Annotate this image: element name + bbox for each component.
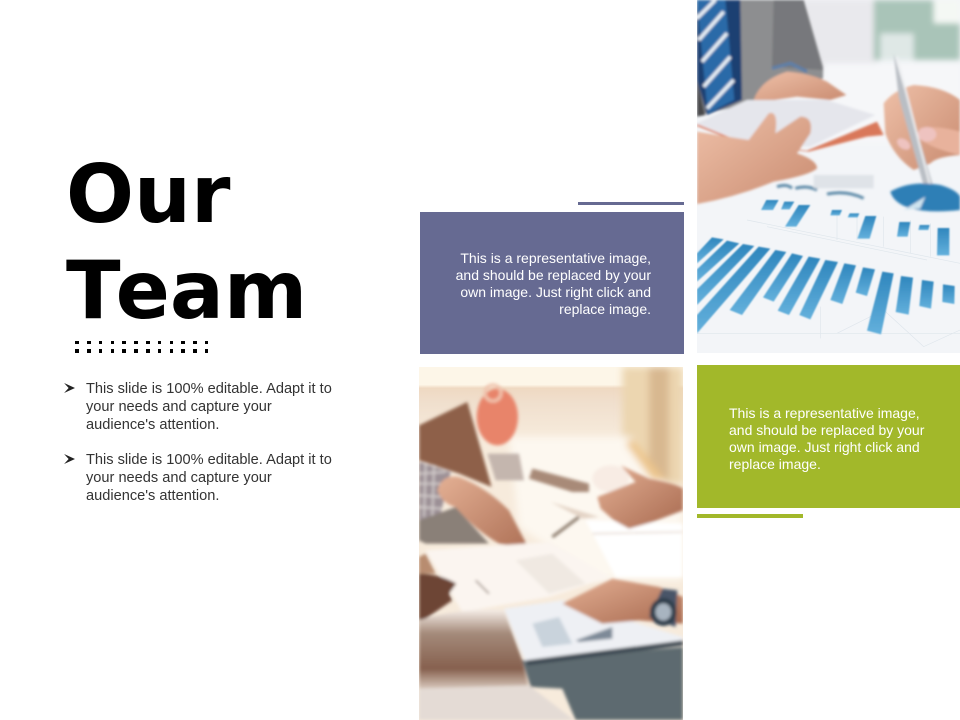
bullet 2: your needs and capture your: [86, 470, 272, 486]
bullet 1: audience's attention.: [86, 417, 219, 433]
bullet 2: This slide is 100% editable. Adapt it to: [86, 452, 332, 468]
caption text: and should be replaced by your: [729, 422, 924, 438]
dotted decoration under title: [75, 341, 208, 353]
caption text: [456, 250, 651, 317]
bullet 1: your needs and capture your: [86, 399, 272, 415]
bullet 2: audience's attention.: [86, 488, 219, 504]
caption text: replace image.: [729, 456, 821, 472]
panel: purple caption: [420, 212, 684, 354]
caption text: [729, 405, 924, 472]
bullet 2: [64, 452, 332, 504]
accent line: green: [697, 514, 803, 518]
title: [66, 148, 307, 337]
caption text: replace image.: [559, 301, 651, 317]
panel: green caption: [697, 365, 960, 508]
caption text: This is a representative image,: [460, 250, 651, 266]
photo: business charts and hands: [697, 0, 960, 353]
title: Our: [66, 148, 230, 241]
bullet list: [64, 381, 332, 504]
bullet 1: [64, 381, 332, 433]
accent line: purple: [578, 202, 684, 205]
caption text: own image. Just right click and: [460, 284, 651, 300]
caption text: and should be replaced by your: [456, 267, 651, 283]
title: Team: [66, 244, 307, 337]
bullet 1: This slide is 100% editable. Adapt it to: [86, 381, 332, 397]
caption text: This is a representative image,: [729, 405, 920, 421]
photo: team discussing documents at desk: [419, 367, 683, 720]
caption text: own image. Just right click and: [729, 439, 920, 455]
